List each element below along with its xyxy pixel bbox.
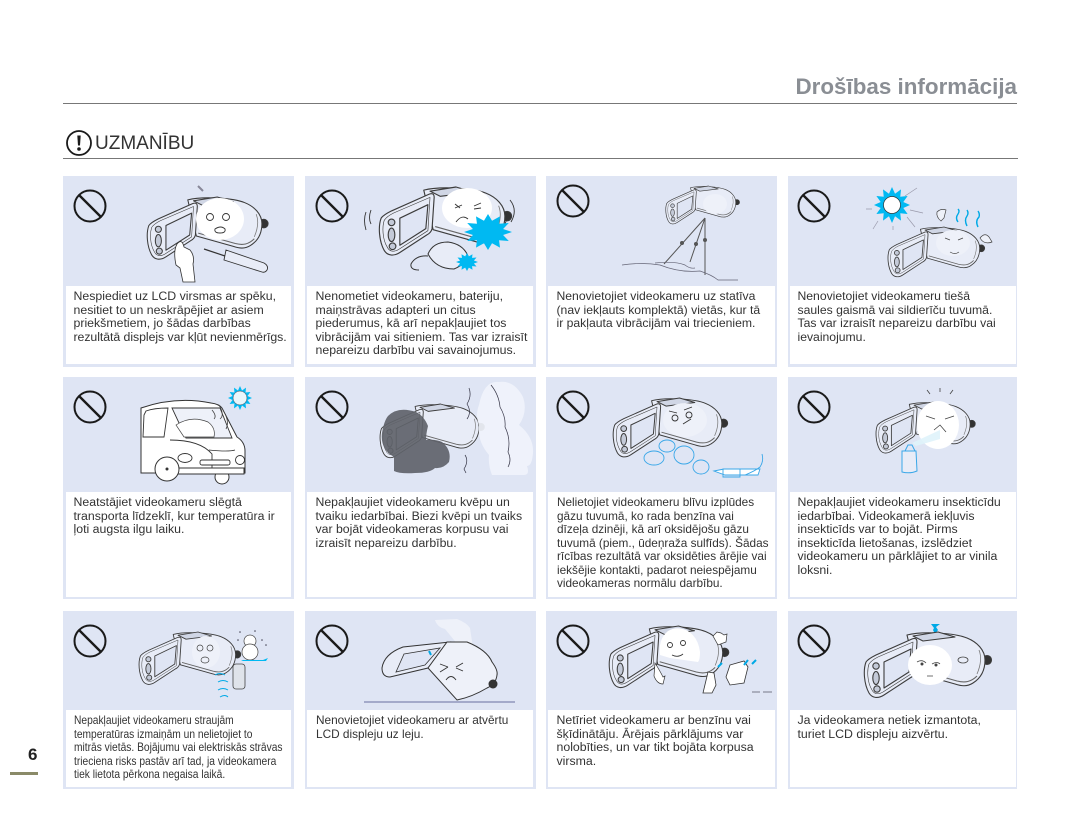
panel: LCD down <box>305 611 536 789</box>
panel text background <box>790 710 1016 787</box>
text: vibrācijām vai sitieniem. Tas var izraisīt <box>316 330 527 344</box>
illustration: camera hit with adapter <box>316 186 515 271</box>
text: šķīdinātāju. Ārējais pārklājums var <box>556 726 743 740</box>
text: insekticīda lietošanas, izslēdziet <box>798 536 972 550</box>
illustration: camera and fleeing solvent bottles <box>556 624 772 694</box>
text: (nav iekļauts komplektā) vietās, kur tā <box>556 302 760 316</box>
text: tuvumā (piem., ūdeņraža sulfīds). Šādas <box>556 536 768 550</box>
illustration: camera placed face down <box>316 619 515 703</box>
text: insekticīds var to bojāt. Pirms <box>798 522 958 536</box>
panel: keep LCD closed <box>788 611 1017 789</box>
text <box>74 495 275 536</box>
text: videokameras normālu darbību. <box>556 576 722 590</box>
illustration: camera with snowman <box>74 624 268 698</box>
text: Nenovietojiet videokameru ar atvērtu <box>316 713 508 727</box>
page number: 6 <box>28 745 37 764</box>
text: Nepakļaujiet videokameru straujām <box>74 713 233 727</box>
text: Nepakļaujiet videokameru insekticīdu <box>798 495 1001 509</box>
page title: Drošības informācija <box>796 74 1017 99</box>
text: trieciena risks pastāv arī tad, ja videokamera <box>74 754 276 768</box>
illustration: camera sprayed with insecticide <box>798 388 976 474</box>
panel text background <box>548 492 775 597</box>
text <box>798 713 981 740</box>
panel: soot and steam <box>305 377 536 599</box>
illustration: camera in sun <box>798 187 992 278</box>
section heading: UZMANĪBU <box>66 130 194 156</box>
text <box>74 713 282 781</box>
panel text background <box>790 286 1016 364</box>
text: iedarbībai. Videokamerā iekļuvis <box>798 508 975 522</box>
illustration: camera on tripod <box>556 184 740 280</box>
illustration: sleeping camera <box>798 624 992 698</box>
panel: insecticide <box>788 377 1017 599</box>
text: iekšējie kontakti, padarot neiespējamu <box>556 562 756 576</box>
text: izraisīt nepareizu darbību. <box>316 536 457 550</box>
text: Nenovietojiet videokameru tiešā <box>798 289 970 303</box>
text: piederumus, kā arī nepakļaujiet tos <box>316 316 506 330</box>
panel text background <box>307 710 533 787</box>
text <box>556 495 768 590</box>
text: rezultātā displejs var kļūt nevienmērīgs. <box>74 330 287 344</box>
text: ir pakļauta vibrācijām vai triecieniem. <box>556 316 755 330</box>
text <box>798 289 996 344</box>
text: Neatstājiet videokameru slēgtā <box>74 495 242 509</box>
text: ļoti augsta ilgu laiku. <box>74 522 184 536</box>
illustration: camera and exhaust <box>556 390 764 478</box>
panel: dropping <box>305 176 536 367</box>
panel: sunlight <box>788 176 1017 367</box>
text: var bojāt videokameras korpusu vai <box>316 522 508 536</box>
panel: temperature and humidity <box>63 611 294 789</box>
text: ievainojumu. <box>798 330 866 344</box>
icon: exclamation <box>66 130 92 156</box>
text: nesitiet to un neskrāpējiet ar asiem <box>74 302 264 316</box>
panel text background <box>66 286 291 364</box>
heading text: UZMANĪBU <box>95 133 194 154</box>
panel text background <box>66 492 291 597</box>
text: tiek lietota pērkona negaisa laikā. <box>74 767 225 781</box>
panel: tripod <box>546 176 777 367</box>
text: Nenometiet videokameru, bateriju, <box>316 289 503 303</box>
illustration: camera in car <box>74 386 252 484</box>
text: Ja videokamera netiek izmantota, <box>798 713 981 727</box>
text: tvaiku iedarbībai. Biezi kvēpi un tvaiks <box>316 508 522 522</box>
text <box>556 713 754 768</box>
panel: LCD pressure <box>63 176 294 367</box>
illustration: camera pressed and screwdriver <box>74 185 269 282</box>
illustration: camera in smoke and steam <box>316 382 533 475</box>
panel text background <box>66 710 291 787</box>
text: Nespiediet uz LCD virsmas ar spēku, <box>74 289 276 303</box>
panel: solvents <box>546 611 777 789</box>
panel text background <box>307 492 533 597</box>
panel: exhaust gas <box>546 377 777 599</box>
text: LCD displeju uz leju. <box>316 726 423 740</box>
text: mitrās vietās. Bojājumu vai elektriskās strāvas <box>74 740 282 754</box>
panel text background <box>548 710 775 787</box>
text: turiet LCD displeju aizvērtu. <box>798 726 948 740</box>
text <box>316 495 522 550</box>
panel text background <box>307 286 533 364</box>
text: gāzu tuvumā, ko rada benzīna vai <box>556 508 733 522</box>
text: saules gaismā vai sildierīču tuvumā. <box>798 302 992 316</box>
panel: hot car <box>63 377 294 599</box>
text: nolobīties, un var tikt bojāta korpusa <box>556 740 754 754</box>
text <box>556 289 760 330</box>
text: dīzeļa dzinēji, kā arī oksidējošu gāzu <box>556 522 748 536</box>
text: maiņstrāvas adapteri un citus <box>316 302 476 316</box>
text <box>316 713 508 740</box>
text: rīcības rezultātā var oksidēties ārējie vai <box>556 549 766 563</box>
text: Tas var izraisīt nepareizu darbību vai <box>798 316 996 330</box>
text <box>74 289 287 344</box>
text: Nepakļaujiet videokameru kvēpu un <box>316 495 510 509</box>
text: priekšmetiem, jo šādas darbības <box>74 316 251 330</box>
text: temperatūras izmaiņām un nelietojiet to <box>74 726 252 740</box>
text: Nenovietojiet videokameru uz statīva <box>556 289 755 303</box>
panel text background <box>790 492 1016 597</box>
panel text background <box>548 286 775 364</box>
text: Netīriet videokameru ar benzīnu vai <box>556 713 751 727</box>
text: loksni. <box>798 562 832 576</box>
text: nepareizu darbību vai savainojumus. <box>316 343 516 357</box>
text: virsma. <box>556 754 596 768</box>
text <box>316 289 528 357</box>
page number bar <box>10 772 38 775</box>
text: transporta līdzeklī, kur temperatūra ir <box>74 508 275 522</box>
text: Nelietojiet videokameru blīvu izplūdes <box>556 495 754 509</box>
text <box>798 495 1001 576</box>
text: videokameru un pārklājiet to ar vinila <box>798 549 997 563</box>
